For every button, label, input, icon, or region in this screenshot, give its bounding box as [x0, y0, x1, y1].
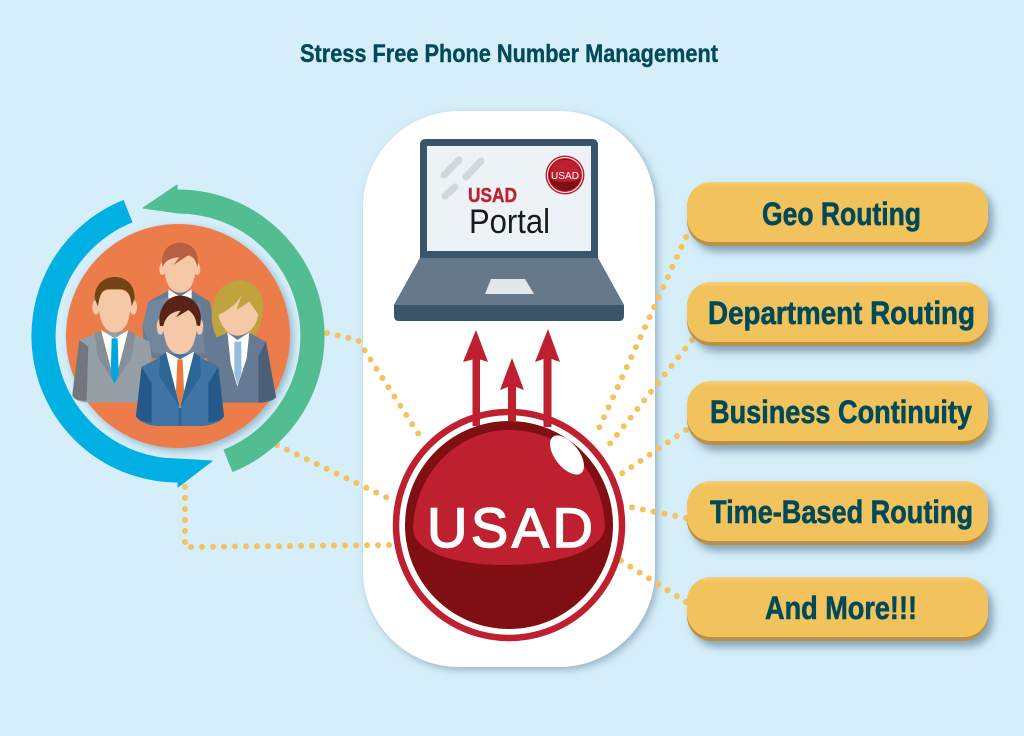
blue arrow: [32, 201, 212, 487]
text: USAD: USAD: [468, 185, 517, 207]
panel: white capsule: [363, 111, 655, 667]
button: Geo Routing: [687, 182, 988, 246]
text: Portal: Portal: [469, 203, 550, 241]
button: Business Continuity: Business Continuity: [710, 394, 972, 430]
button: Business Continuity: [687, 381, 988, 445]
dotted connectors: [185, 237, 692, 602]
arrows: up from ball to laptop: [463, 329, 560, 427]
laptop bezel: [420, 139, 598, 258]
icon: USAD ball: [396, 412, 622, 638]
icon: small USAD logo: USAD: [551, 171, 579, 182]
icon: small USAD logo: [546, 156, 584, 194]
trackpad: [485, 279, 534, 294]
laptop base: [394, 258, 624, 321]
team people: [72, 243, 276, 426]
person: woman: [207, 280, 276, 403]
icon: orange circle with team: [66, 224, 290, 448]
person: back: [142, 243, 217, 358]
button: Time-Based Routing: [687, 481, 988, 545]
button: Geo Routing: Geo Routing: [762, 196, 921, 232]
icon: cycle arrows: [32, 185, 324, 487]
text: USAD: USAD: [427, 496, 593, 559]
button: Department Routing: [687, 282, 988, 346]
button: And More!!!: [687, 577, 988, 641]
title: Stress Free Phone Number Management: [300, 40, 719, 68]
icon: laptop: [394, 139, 624, 321]
button: And More!!!: And More!!!: [765, 590, 917, 626]
glass reflections: [444, 160, 481, 196]
button: Time-Based Routing: Time-Based Routing: [710, 494, 973, 530]
button: Department Routing: Department Routing: [708, 295, 975, 331]
laptop screen: [427, 146, 591, 251]
person: left man: [72, 277, 152, 402]
person: front man: [136, 296, 224, 426]
green arrow: [143, 185, 324, 471]
